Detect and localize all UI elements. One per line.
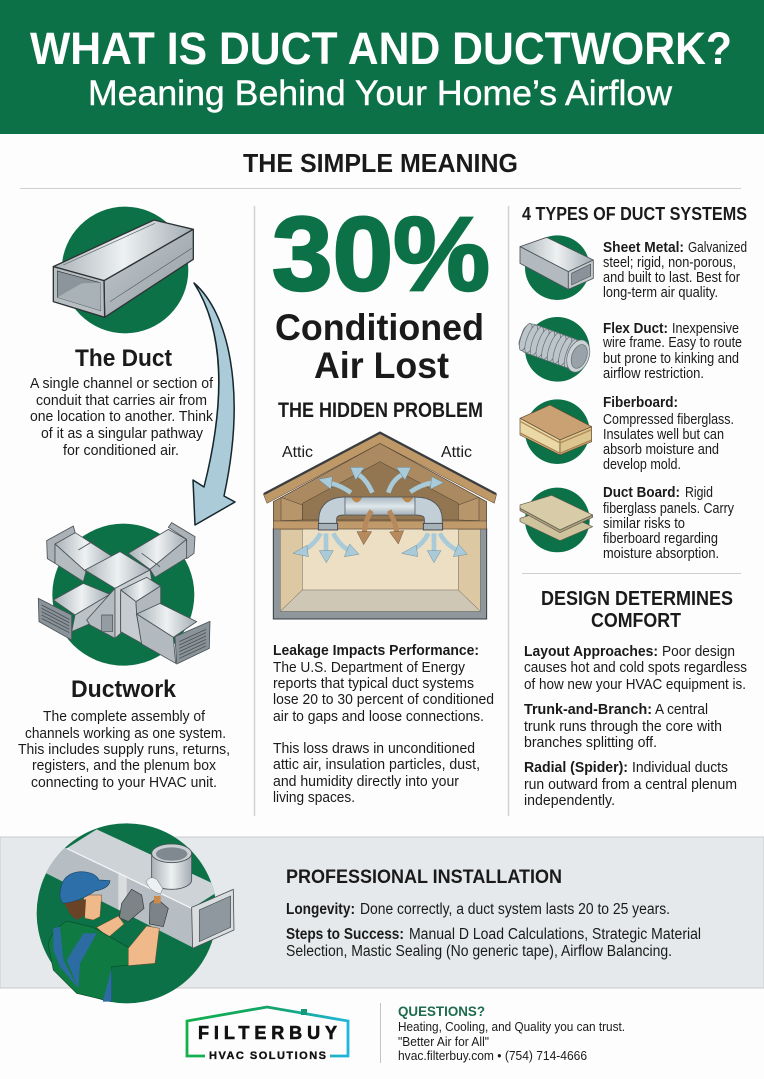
text: radial: independently. [524,792,615,809]
text: fiberboard: Insulates well but can [603,427,724,443]
text: ductwork description [18,708,230,791]
header banner [0,0,764,134]
arrow: duct to ductwork [193,283,235,525]
text: loss effects: and humidity directly into your [273,773,459,790]
leaking duct [328,506,433,529]
icon: duct board [520,488,593,552]
text: trunk-and-branch [524,701,722,751]
text: duct board: fiberboard regarding [603,531,718,547]
text: flex duct [602,321,742,382]
heading: the simple meaning: THE SIMPLE MEANING [243,148,518,178]
text: sheet metal [603,240,747,301]
text: duct board: Rigid [685,485,713,501]
panel: ductwork [18,523,230,791]
title: WHAT IS DUCT AND DUCTWORK? [30,23,732,74]
text: leakage impacts: air to gaps and loose connections. [273,708,484,725]
text: ductwork description: channels working as one system. [25,725,226,742]
heading: design determines comfort: DESIGN DETERMINES [541,588,733,610]
text: loss effects: This loss draws in unconditioned [273,740,475,757]
icon: single duct [53,207,193,333]
text: fiberboard: Compressed fiberglass. [603,412,734,428]
text: ductwork description: registers, and the plenum box [32,757,216,774]
text: questions contact: hvac.filterbuy.com • (754) 714-4666 [398,1049,587,1063]
text: duct board: Duct Board: [603,485,680,501]
text: leakage impacts: lose 20 to 30 percent of conditioned [273,691,494,708]
text: trunk-and-branch: Trunk-and-Branch: [524,701,652,718]
text: sheet metal: long-term air quality. [603,285,718,301]
text: questions contact: "Better Air for All" [398,1035,489,1049]
heading: ductwork: Ductwork [71,676,177,703]
text: sheet metal: steel; rigid, non-porous, [603,255,736,271]
heading: design determines comfort: COMFORT [591,610,681,632]
text: steps to success: Steps to Success: [286,926,404,943]
text: radial: Individual ducts [632,759,728,776]
text: leakage impacts: reports that typical duct systems [273,675,474,692]
text: leakage impacts: The U.S. Department of Energy [273,659,465,676]
text: flex duct: but prone to kinking and [603,351,739,367]
stat caption [275,307,484,386]
text: duct description: one location to another. Think [30,408,213,425]
text: trunk-and-branch: trunk runs through the core with [524,718,722,735]
labels: attic: Attic [441,444,472,461]
text: flex duct: airflow restriction. [603,366,704,382]
text: duct description: for conditioned air. [63,442,179,459]
text: ductwork description: This includes supply runs, returns, [18,741,230,758]
panel: 4 types of duct systems [516,204,747,562]
text: layout approaches: of how new your HVAC equipment is. [524,676,746,693]
logo: filterbuy hvac solutions: FILTERBUY [198,1023,337,1043]
text: fiberboard: absorb moisture and [603,442,719,458]
text: duct board: similar risks to [603,516,685,532]
icon: sheet metal [520,235,593,300]
text: questions contact [398,1003,625,1063]
subtitle: Meaning Behind Your Home’s Airflow [88,74,673,113]
heading: professional installation: PROFESSIONAL INSTALLATION [286,866,562,888]
text: duct board: fiberglass panels. Carry [603,501,735,517]
text: loss effects: attic air, insulation particles, dust, [273,756,480,773]
text: flex duct: Flex Duct: [603,321,668,337]
text: layout approaches: Poor design [662,643,735,660]
text: duct description: conduit that carries air from [36,392,207,409]
text: fiberboard: develop mold. [603,457,681,473]
text: longevity: Done correctly, a duct system lasts 20 to 25 years. [360,901,670,918]
text: leakage impacts: Leakage Impacts Performance: [273,642,479,659]
text: duct description [30,375,214,459]
text: layout approaches [524,643,747,693]
text: radial [524,759,737,809]
text: questions contact: Heating, Cooling, and Quality you can trust. [398,1020,625,1034]
logo: filterbuy hvac solutions: HVAC SOLUTIONS [209,1050,326,1062]
panel: professional installation [0,823,764,1003]
logo: filterbuy hvac solutions [187,1007,348,1062]
text: sheet metal: and built to last. Best for [603,270,740,286]
labels: attic [282,444,472,461]
text: trunk-and-branch: branches splitting off. [524,734,657,751]
panel: the duct [30,207,214,459]
icon: fiberboard [520,399,592,464]
heading: the duct: The Duct [75,345,172,372]
panel: design determines comfort [524,588,747,809]
arrows: leaking air [304,475,458,552]
icon: ductwork assembly [38,523,210,666]
text: flex duct: Inexpensive [672,321,739,337]
text: radial: Radial (Spider): [524,759,628,776]
text: steps to success: Manual D Load Calculations, Strategic Material [409,926,701,943]
text: steps to success [286,926,701,960]
text: sheet metal: Galvanized [688,240,747,256]
text: radial: run outward from a central plenum [524,776,737,793]
text: fiberboard: Fiberboard: [603,395,678,411]
illustration: technician sealing duct [20,823,234,1003]
panel: hidden problem [263,196,497,806]
labels: attic: Attic [282,444,313,461]
text: sheet metal: Sheet Metal: [603,240,684,256]
text: loss effects: living spaces. [273,789,355,806]
stat caption: Air Lost [314,345,449,386]
technician [97,916,124,937]
text: ductwork description: The complete assembly of [43,708,206,725]
text: fiberboard [603,395,734,473]
heading: design determines comfort [541,588,733,632]
text: ductwork description: connecting to your HVAC unit. [31,774,217,791]
text: duct board [603,485,735,562]
text: layout approaches: Layout Approaches: [524,643,658,660]
text: trunk-and-branch: A central [655,701,708,718]
text: duct board: moisture absorption. [603,546,719,562]
text: questions contact: QUESTIONS? [398,1003,485,1019]
text: duct description: of it as a singular pathway [41,425,203,442]
text: duct description: A single channel or section of [30,375,214,392]
icon: house cross-section with leaking duct [263,433,497,619]
footer [187,1003,625,1063]
text: loss effects [273,740,480,806]
stat caption: Conditioned [275,307,484,348]
text: leakage impacts [273,642,494,725]
icon: flex duct [516,317,594,382]
text: steps to success: Selection, Mastic Sealing (No generic tape), Airflow Balancing. [286,943,672,960]
stat: 30 percent: 30% [272,196,490,313]
text: flex duct: wire frame. Easy to route [602,335,742,351]
heading: the hidden problem: THE HIDDEN PROBLEM [278,399,483,422]
text: longevity: Longevity: [286,901,355,918]
